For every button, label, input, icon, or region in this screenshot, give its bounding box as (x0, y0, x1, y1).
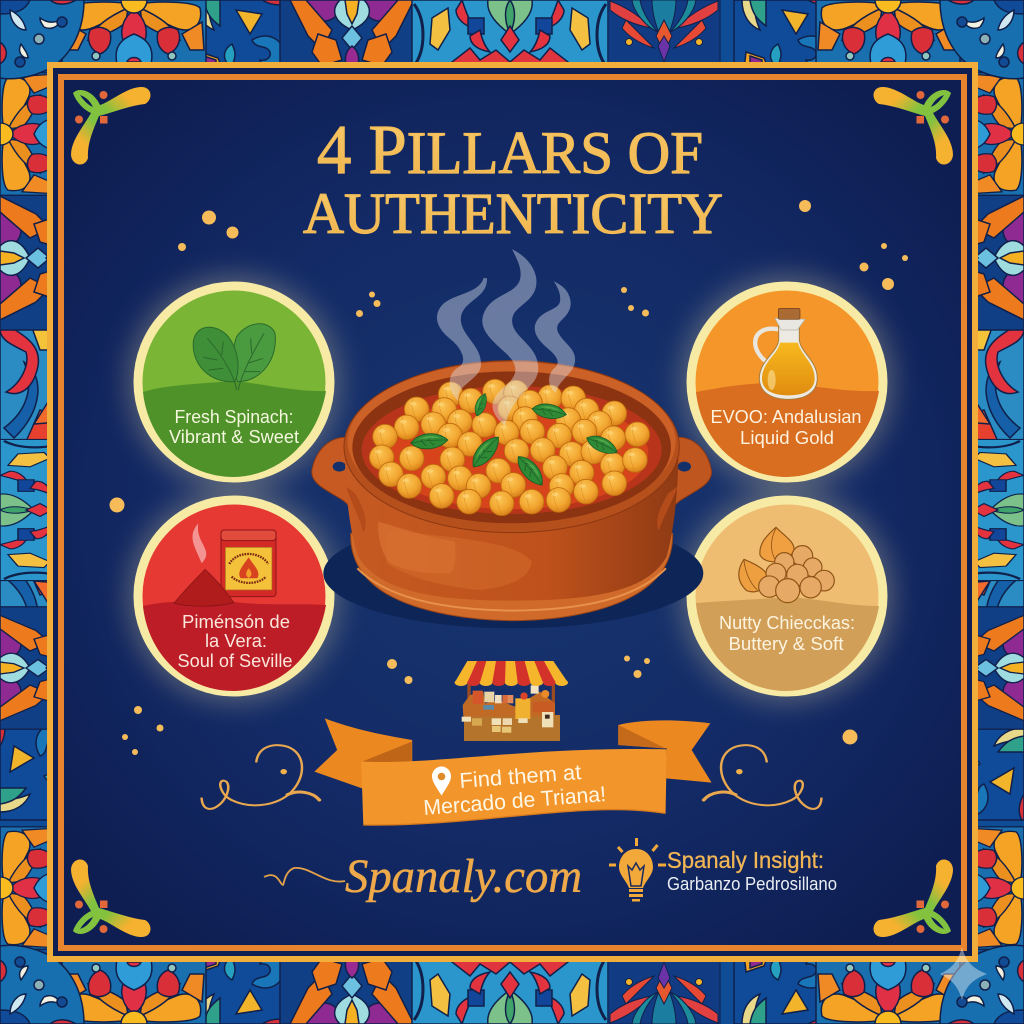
pot body (345, 453, 678, 601)
steam wisps (439, 253, 573, 423)
title: AUTHENTICITY (303, 181, 723, 246)
foot of pot (351, 533, 673, 621)
label: pimenton: la Vera: (205, 630, 267, 651)
panel: pimenton pillar (138, 500, 330, 692)
title (303, 112, 723, 246)
label: pimenton (178, 611, 292, 671)
tile band: bottom (62, 946, 960, 1024)
label: fresh spinach: Fresh Spinach: (174, 406, 294, 427)
banner text: Find them at (459, 760, 582, 793)
panel: fresh spinach pillar (138, 286, 330, 478)
swirl: right (704, 745, 821, 809)
ornament: top right (874, 87, 953, 164)
corner ornaments (71, 87, 953, 937)
ribbon tails (314, 718, 412, 788)
title: 4 PILLARS OF (317, 112, 703, 189)
ornament: bottom right (874, 860, 953, 937)
icon: market stall (455, 661, 568, 741)
label: chickpeas (719, 612, 855, 654)
icon: olive oil jug (755, 308, 817, 399)
banner ribbon (314, 718, 712, 825)
watermark sparkle (940, 947, 987, 1000)
brand: Spanaly.com: Spanaly.com (345, 850, 582, 903)
panel: EVOO pillar (691, 286, 883, 478)
label: chickpeas: Buttery & Soft (728, 633, 844, 654)
icon: chickpea cluster (739, 527, 834, 603)
label: EVOO: Liquid Gold (740, 427, 834, 448)
label: fresh spinach (169, 406, 299, 447)
label: pimenton: Piménsón de (182, 611, 290, 632)
panel: chickpeas pillar (691, 500, 883, 692)
insight text (667, 847, 837, 894)
handles (312, 437, 712, 533)
ornament: bottom left (71, 860, 150, 937)
flourish swirls (202, 745, 821, 809)
tile band: left (0, 73, 78, 949)
insight text: Spanaly Insight: (667, 847, 824, 873)
pot rim (344, 361, 679, 533)
pillar glows (128, 276, 893, 702)
decorative gold dots (110, 200, 908, 755)
label: EVOO (710, 406, 862, 448)
label: chickpeas: Nutty Chiecckas: (719, 612, 855, 633)
central illustration: clay pot of chickpeas (312, 253, 712, 628)
pot shadow (323, 518, 703, 628)
banner text (423, 760, 607, 820)
pot highlights (378, 522, 456, 574)
stew (362, 386, 662, 514)
insight text: Garbanzo Pedrosillano (667, 873, 837, 894)
label: EVOO: EVOO: Andalusian (710, 406, 862, 427)
chickpeas (369, 379, 650, 516)
handle attachments (346, 487, 677, 533)
icon: paprika tin and pile (174, 523, 276, 606)
icon: location pin (432, 766, 451, 796)
spinach leaves on stew (410, 392, 620, 490)
swirl: left (202, 745, 319, 809)
label: fresh spinach: Vibrant & Sweet (169, 426, 299, 447)
banner text: Mercado de Triana! (423, 782, 607, 820)
label: pimenton: Soul of Seville (178, 650, 292, 671)
ornament: top left (71, 87, 150, 164)
tile band: top (62, 0, 960, 78)
ribbon body (361, 749, 667, 825)
icon: light bulb (609, 838, 666, 902)
icon: spinach leaves (193, 324, 275, 390)
main navy panel with double frame (50, 65, 975, 959)
stall awning (455, 661, 568, 686)
tile band: right (946, 73, 1024, 949)
